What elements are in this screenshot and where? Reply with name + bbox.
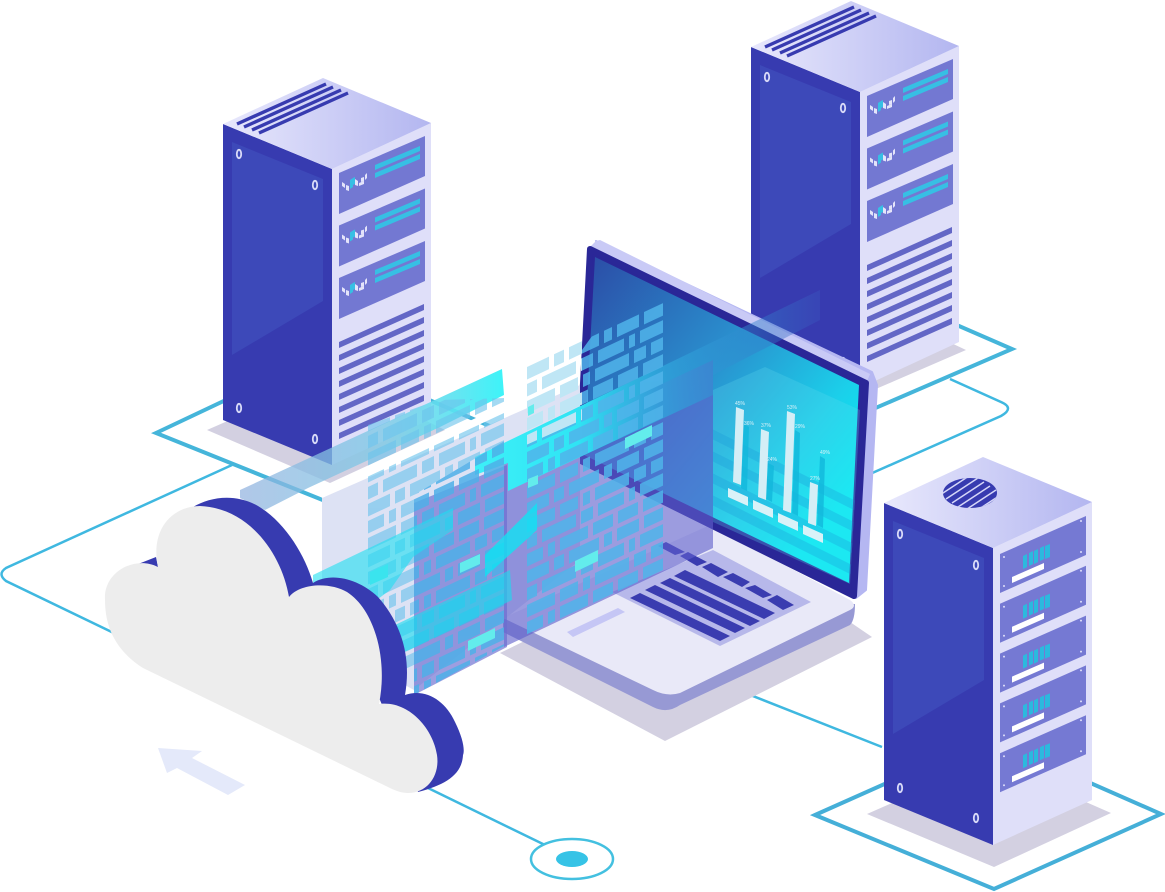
laptop shadow xyxy=(500,540,872,741)
bar chart on screen: 24% xyxy=(767,457,778,463)
data band: lower cyan center xyxy=(485,503,537,577)
data band: lower cyan left xyxy=(313,508,453,605)
cloud xyxy=(105,498,464,793)
laptop lid xyxy=(596,241,877,598)
keyboard xyxy=(567,542,811,646)
server rack: bottom right xyxy=(884,457,1092,845)
data bricks: left wall xyxy=(368,398,504,694)
data band: bottom cyan xyxy=(395,570,512,655)
bar chart on screen: 49% xyxy=(820,450,831,456)
connector node: ring xyxy=(531,839,613,879)
bar chart on screen: 29% xyxy=(795,424,806,430)
bar chart on screen: 45% xyxy=(735,401,746,407)
server rack: left xyxy=(223,78,431,465)
data band: middle cyan xyxy=(475,290,820,491)
icon: fan vent xyxy=(943,478,997,508)
bar chart on screen: 36% xyxy=(744,421,755,427)
screen xyxy=(584,257,859,583)
bar chart on screen: 37% xyxy=(761,423,772,429)
data plane: purple wall right xyxy=(504,360,713,647)
connector lines xyxy=(2,379,1008,845)
data bricks: right wall xyxy=(527,303,663,634)
platform: server 1 xyxy=(156,354,508,505)
platform: server 2 xyxy=(714,283,1012,413)
platform: server 3 xyxy=(815,738,1161,889)
data plane: purple wall left xyxy=(414,465,507,695)
trackpad xyxy=(567,608,625,637)
screen bezel xyxy=(579,249,866,596)
arrow: upload direction xyxy=(158,748,245,795)
server rack: top right xyxy=(751,1,959,388)
bar chart on screen xyxy=(713,367,860,584)
data plane: pale back wall xyxy=(322,385,580,690)
laptop base xyxy=(503,525,855,710)
bar chart on screen: 53% xyxy=(787,405,798,411)
bar chart on screen: 27% xyxy=(810,476,821,482)
data band: upper cyan xyxy=(240,369,504,510)
data plane: white gap stripe xyxy=(320,405,504,498)
laptop xyxy=(500,240,877,741)
